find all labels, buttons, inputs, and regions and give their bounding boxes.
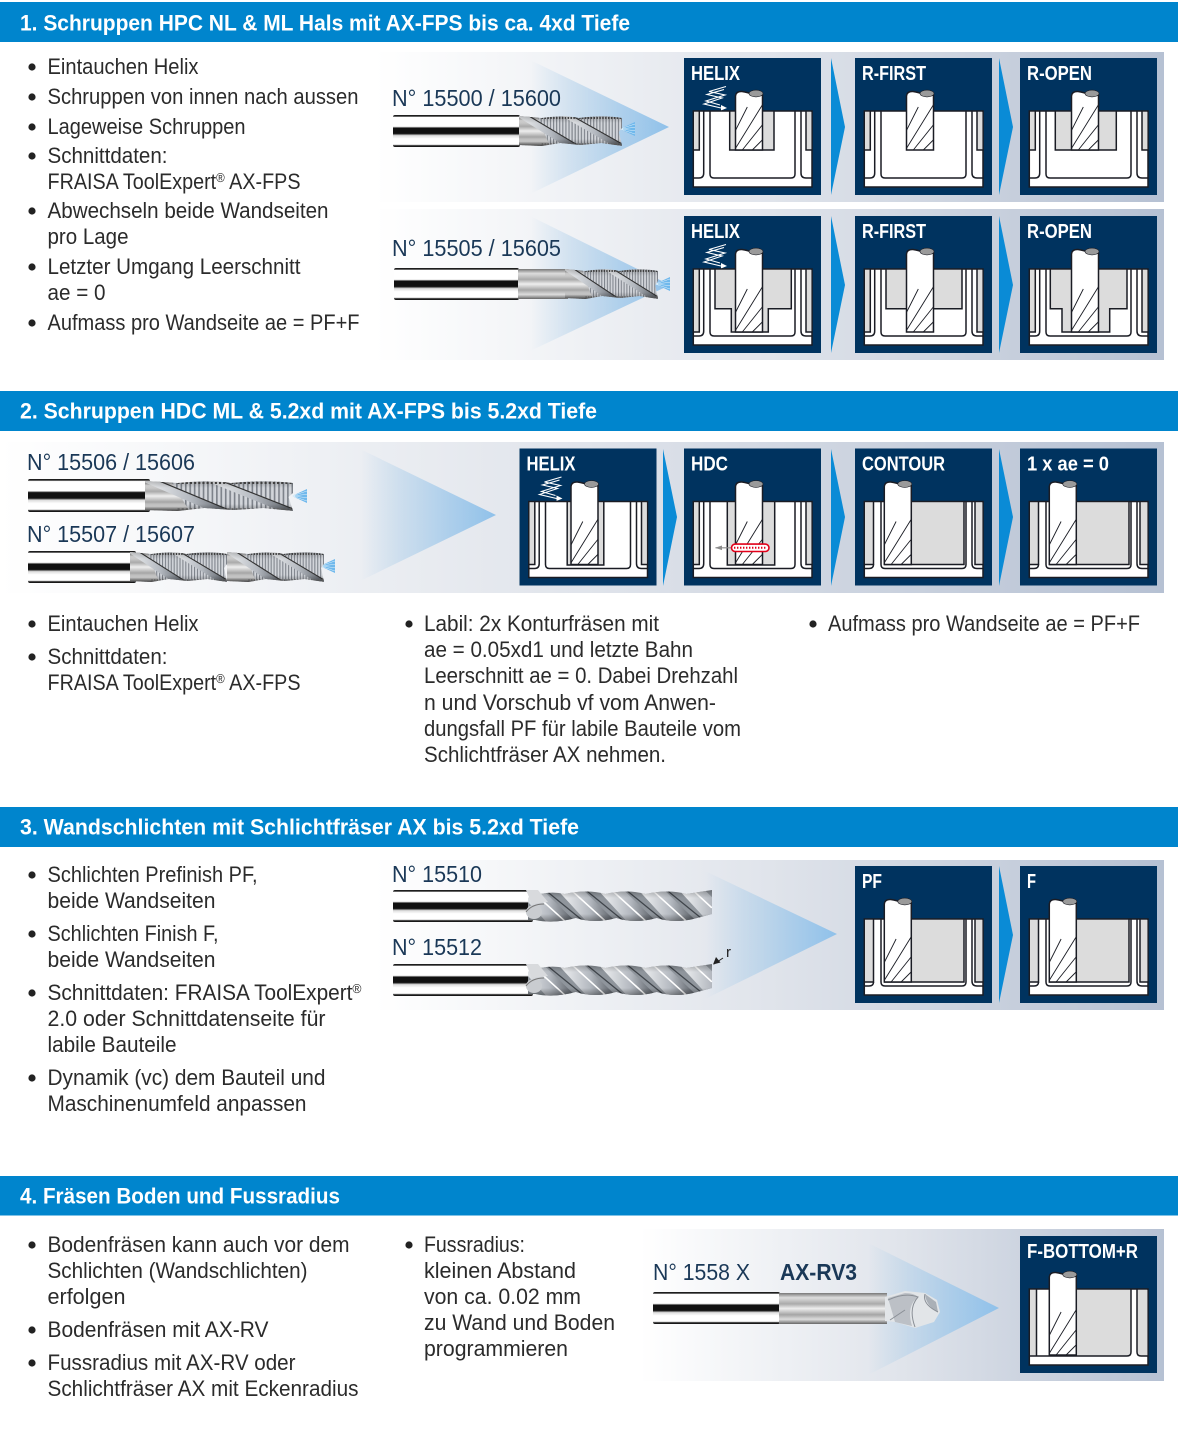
text block: section 4 left list	[28, 1232, 359, 1401]
step panel: F-BOTTOM+R: F-BOTTOM+R	[1027, 1241, 1138, 1263]
text block: section 4 left list: Bodenfräsen mit AX-RV	[48, 1317, 269, 1342]
text block: section 1 bullet list: pro Lage	[48, 224, 128, 249]
text block: section 2 right list: Aufmass pro Wandseite ae = PF+F	[828, 611, 1140, 636]
tool label: N° 15510	[392, 861, 482, 887]
text block: section 2 left list: FRAISA ToolExpert	[48, 670, 235, 695]
text block: section 3 list: Schnittdaten: FRAISA ToolExpert	[48, 980, 370, 1005]
header: section 3: 3. Wandschlichten mit Schlichtfräser AX bis 5.2xd Tiefe	[20, 814, 579, 839]
step panel: R-FIRST: R-FIRST	[862, 63, 926, 85]
step panel: HDC: HDC	[691, 454, 728, 476]
arrow	[663, 449, 677, 586]
tool image	[28, 479, 307, 512]
text block: section 4 middle list: zu Wand und Boden	[424, 1310, 615, 1335]
step panel: PF: PF	[862, 871, 882, 893]
text block: section 3 list: Schlichten Finish F,	[48, 921, 218, 946]
arrow	[831, 449, 845, 586]
arrow	[831, 58, 845, 195]
step panel: R-FIRST	[855, 58, 992, 195]
tool label: N° 15506 / 15606	[27, 449, 195, 475]
header: section 4	[0, 1176, 1178, 1216]
step panel: R-OPEN: R-OPEN	[1027, 63, 1092, 85]
text block: section 1 bullet list: FRAISA ToolExpert	[48, 169, 235, 194]
arrow	[999, 58, 1013, 195]
arrow	[999, 866, 1013, 1003]
text block: section 4 left list: Schlichtfräser AX mit Eckenradius	[48, 1376, 358, 1401]
step panel: CONTOUR	[855, 448, 992, 586]
text block: section 1 bullet list: Schnittdaten:	[48, 143, 168, 168]
text block: section 2 middle list: dungsfall PF für labile Bauteile vom	[424, 716, 741, 741]
tool name: AX-RV3	[780, 1259, 857, 1285]
text block: section 4 middle list: von ca. 0.02 mm	[424, 1284, 581, 1309]
text block: section 2 middle list: Leerschnitt ae = 0. Dabei Drehzahl	[424, 663, 738, 688]
corner radius marker: r	[726, 944, 731, 961]
text block: section 4 middle list	[405, 1232, 615, 1361]
text block: section 4 middle list: kleinen Abstand	[424, 1258, 576, 1283]
text block: section 3 list: ®	[352, 981, 362, 996]
tool image	[393, 964, 738, 996]
panel: section 2 tools and strategy	[0, 442, 1164, 593]
text block: section 3 list	[28, 862, 362, 1116]
text block: section 1 bullet list: Aufmass pro Wandseite ae = PF+F	[48, 310, 360, 335]
arrow	[999, 449, 1013, 586]
tool label: N° 15505 / 15605	[392, 235, 561, 261]
header: section 2	[0, 391, 1178, 431]
text block: section 1 bullet list: ae = 0	[48, 280, 106, 305]
text block: section 4 left list: Schlichten (Wandschlichten)	[48, 1258, 308, 1283]
header: section 3	[0, 807, 1178, 847]
step panel: HELIX	[684, 216, 821, 353]
corner radius marker	[713, 944, 731, 964]
step panel: R-OPEN	[1020, 216, 1157, 353]
step panel: HDC	[684, 448, 821, 586]
text block: section 1 bullet list: Abwechseln beide Wandseiten	[48, 198, 328, 223]
step panel: CONTOUR: CONTOUR	[862, 454, 945, 476]
panel: section 1 row 2 tool and strategy	[375, 209, 1164, 360]
step panel: R-FIRST: R-FIRST	[862, 221, 926, 243]
step panel: F-BOTTOM+R	[1020, 1236, 1157, 1373]
step panel: R-FIRST	[855, 216, 992, 353]
tool image	[393, 890, 738, 922]
text block: section 1 bullet list: Letzter Umgang Leerschnitt	[48, 254, 300, 279]
text block: section 2 left list: ®	[216, 671, 225, 686]
step panel: F	[1020, 866, 1157, 1003]
text block: section 3 list: Dynamik (vc) dem Bauteil und	[48, 1065, 326, 1090]
text block: section 1 bullet list	[28, 54, 360, 335]
text block: section 4 left list: Fussradius mit AX-RV oder	[48, 1350, 296, 1375]
step panel: HELIX	[684, 58, 821, 195]
text block: section 3 list: beide Wandseiten	[48, 888, 216, 913]
text block: section 1 bullet list: Schruppen von innen nach aussen	[48, 84, 358, 109]
text block: section 3 list: Maschinenumfeld anpassen	[48, 1091, 306, 1116]
step panel: HELIX: HELIX	[691, 63, 741, 85]
text block: section 4 left list: erfolgen	[48, 1284, 126, 1309]
text block: section 1 bullet list: ®	[216, 170, 225, 185]
panel: section 3 tools and strategy	[375, 860, 1164, 1010]
text block: section 2 middle list: n und Vorschub vf vom Anwen-	[424, 690, 716, 715]
panel: section 4 tool and strategy	[640, 1229, 1164, 1381]
text block: section 2 left list	[28, 611, 301, 695]
panel: section 1 row 1 tool and strategy	[375, 52, 1164, 202]
arrow	[999, 216, 1013, 353]
tool label: N° 15512	[392, 934, 482, 960]
text block: section 2 middle list	[405, 611, 741, 767]
text block: section 4 middle list: Fussradius:	[424, 1232, 525, 1257]
text block: section 3 list: 2.0 oder Schnittdatenseite für	[48, 1006, 326, 1031]
tool image	[653, 1291, 940, 1328]
text block: section 1 bullet list: Eintauchen Helix	[48, 54, 198, 79]
step panel: R-OPEN: R-OPEN	[1027, 221, 1092, 243]
step panel: 1 x ae = 0	[1020, 448, 1157, 586]
step panel: HELIX: HELIX	[691, 221, 741, 243]
tool image	[28, 551, 335, 583]
tool label: N° 15507 / 15607	[27, 521, 195, 547]
text block: section 2 left list: Schnittdaten:	[48, 644, 168, 669]
text block: section 4 middle list: programmieren	[424, 1336, 568, 1361]
text block: section 4 left list: Bodenfräsen kann auch vor dem	[48, 1232, 350, 1257]
step panel: 1 x ae = 0: 1 x ae = 0	[1027, 454, 1109, 476]
text block: section 2 left list: Eintauchen Helix	[48, 611, 198, 636]
text block: section 2 middle list: ae = 0.05xd1 und letzte Bahn	[424, 637, 693, 662]
text block: section 3 list: beide Wandseiten	[48, 947, 216, 972]
text block: section 2 left list: AX-FPS	[225, 670, 300, 695]
tool image	[394, 268, 670, 300]
step panel: R-OPEN	[1020, 58, 1157, 195]
text block: section 2 middle list: Schlichtfräser AX nehmen.	[424, 742, 666, 767]
text block: section 1 bullet list: AX-FPS	[225, 169, 300, 194]
header: section 1	[0, 2, 1178, 42]
tool image	[393, 115, 635, 147]
tool label: N° 15500 / 15600	[392, 85, 561, 111]
text block: section 2 middle list: Labil: 2x Konturfräsen mit	[424, 611, 659, 636]
header: section 1: 1. Schruppen HPC NL & ML Hals mit AX-FPS bis ca. 4xd Tiefe	[20, 10, 630, 35]
text block: section 1 bullet list: Lageweise Schruppen	[48, 114, 246, 139]
step panel: HELIX	[520, 448, 656, 586]
arrow	[831, 216, 845, 353]
text block: section 3 list: Schlichten Prefinish PF,	[48, 862, 258, 887]
step panel: F: F	[1027, 871, 1036, 893]
tool label: N° 1558 X	[653, 1259, 750, 1285]
step panel: PF	[855, 866, 992, 1003]
step panel: HELIX: HELIX	[526, 454, 576, 476]
text block: section 3 list: labile Bauteile	[48, 1032, 176, 1057]
header: section 4: 4. Fräsen Boden und Fussradius	[20, 1183, 340, 1208]
header: section 2: 2. Schruppen HDC ML & 5.2xd mit AX-FPS bis 5.2xd Tiefe	[20, 398, 597, 423]
